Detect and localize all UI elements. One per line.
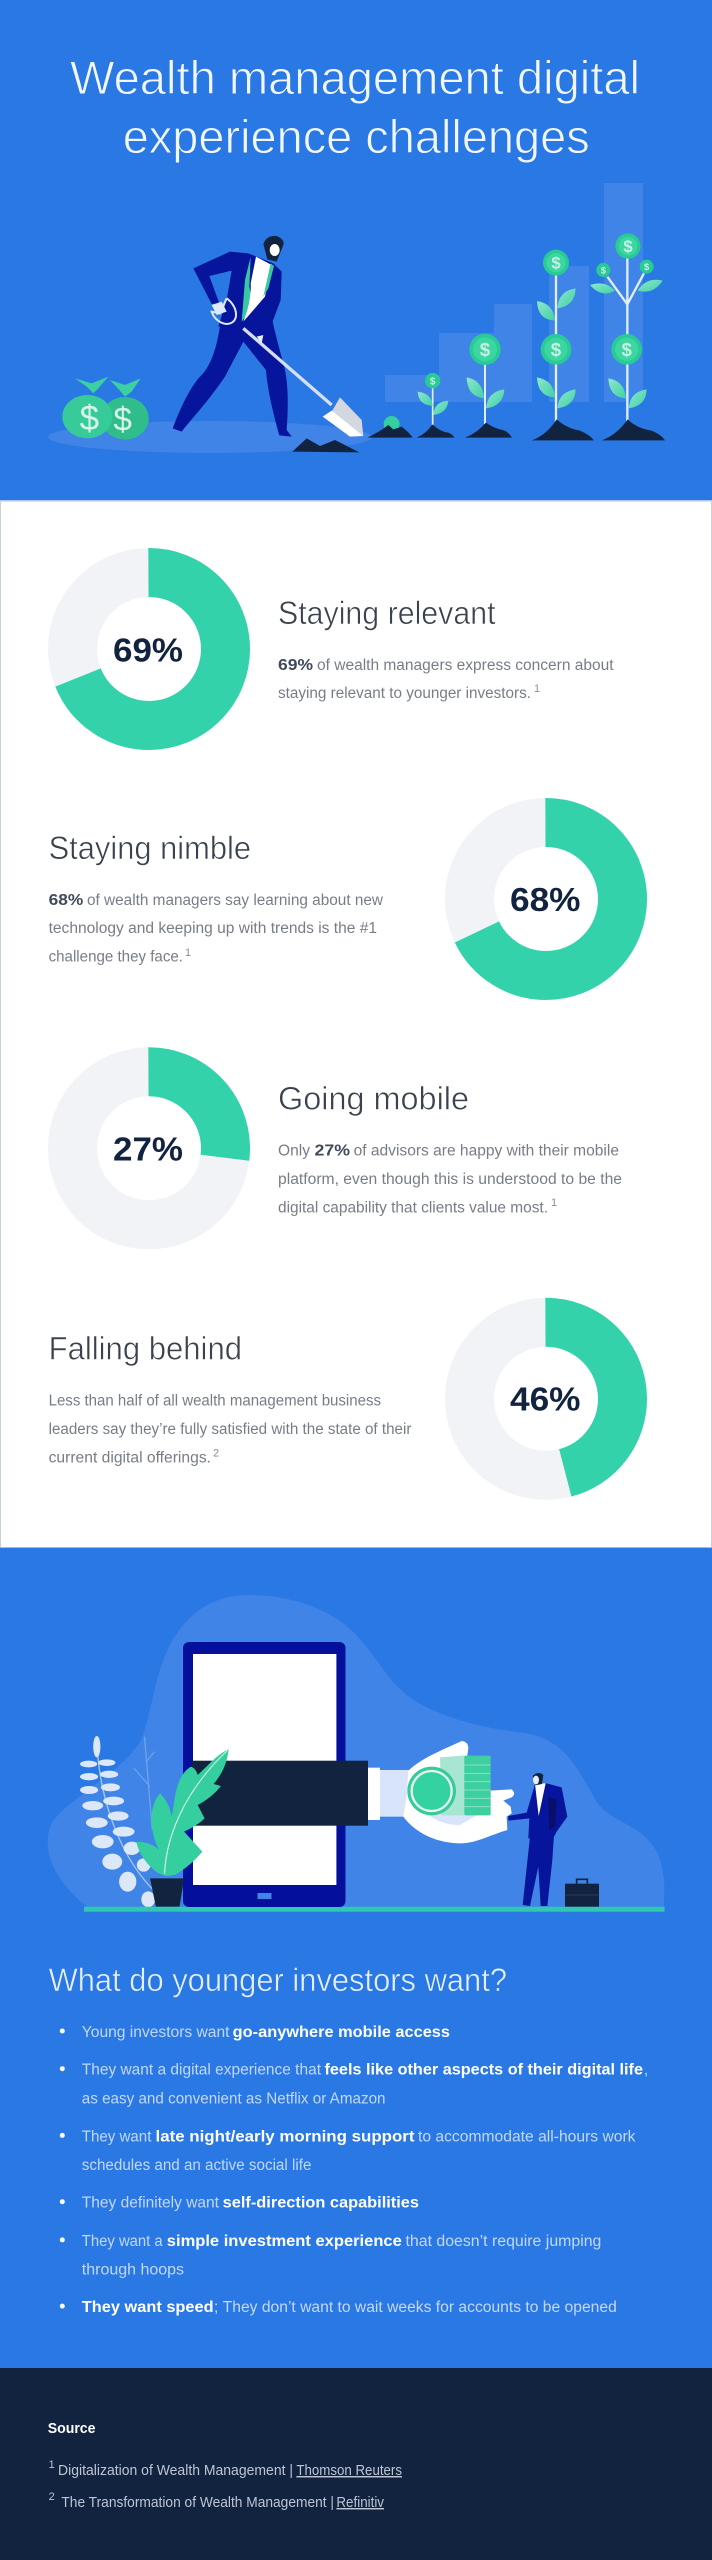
bullet: simple experience: simple investment experience	[167, 2233, 402, 2250]
block: falling behind: current digital offerings.	[49, 1449, 211, 1466]
bullet: digital experience: ,	[644, 2062, 648, 2079]
icon: money bags: $	[80, 399, 99, 438]
source 2: The Transformation of Wealth Management |	[61, 2495, 334, 2511]
bullet: support hours: schedules and an active social life	[82, 2157, 311, 2174]
block: staying nimble	[49, 830, 384, 966]
plant: tall: $	[551, 254, 561, 273]
bullet: simple experience: that doesn’t require jumping	[406, 2233, 601, 2250]
block: falling behind: Falling behind	[49, 1331, 242, 1367]
plant: small: $	[430, 376, 436, 387]
block: staying nimble: of wealth managers say learning about new	[87, 892, 384, 909]
bullet: self-direction: They definitely want	[82, 2195, 220, 2212]
block: staying nimble: technology and keeping up with trends is the #1	[49, 920, 377, 937]
block: going mobile: 27%	[314, 1142, 350, 1160]
title: Wealth management digital	[70, 51, 640, 104]
donut chart: 69%	[72, 572, 226, 726]
bullet: speed: They don’t want to wait weeks for accounts to be opened	[223, 2299, 617, 2316]
panel: source footer	[0, 2368, 712, 2560]
plant: medium: $	[480, 339, 491, 360]
plant: branching: $	[644, 262, 650, 272]
bullet: simple experience: through hoops	[82, 2261, 184, 2278]
block: staying relevant: Staying relevant	[278, 595, 496, 631]
block: falling behind: Less than half of all wealth management business	[49, 1392, 381, 1410]
source heading: Source	[48, 2420, 96, 2437]
bullet: digital experience: feels like other aspects of their digital life	[324, 2062, 643, 2079]
bullet: support hours: late night/early morning support	[156, 2128, 414, 2145]
bullet: simple experience	[60, 2233, 601, 2278]
block: staying relevant: 69%	[278, 657, 313, 674]
icon: hand with money	[368, 1741, 514, 1843]
plant: branching	[590, 233, 665, 440]
bullet: self-direction: self-direction capabilities	[223, 2195, 419, 2212]
plant: medium	[465, 334, 512, 438]
source 2: Refinitiv	[336, 2495, 385, 2511]
title: experience challenges	[123, 110, 590, 163]
title	[70, 51, 640, 163]
icon: potted plant	[136, 1749, 229, 1907]
source 1	[49, 2459, 402, 2479]
ground line	[84, 1907, 664, 1912]
icon: phone	[183, 1642, 346, 1907]
block: staying relevant: of wealth managers express concern about	[317, 657, 614, 674]
bullet: support hours: to accommodate all-hours work	[418, 2128, 636, 2145]
source 1: Digitalization of Wealth Management |	[58, 2463, 293, 2479]
block: staying relevant: staying relevant to younger investors.	[278, 685, 531, 702]
panel: hero	[0, 0, 712, 500]
ground ellipse	[48, 421, 372, 453]
block: going mobile	[278, 1081, 622, 1216]
block: falling behind: 2	[213, 1448, 219, 1460]
arm sleeve	[192, 1761, 368, 1826]
bullet: digital experience	[60, 2062, 648, 2108]
block: staying relevant: 1	[534, 683, 540, 695]
bullet list	[60, 2024, 648, 2316]
plant: tall: $	[551, 339, 562, 360]
plant: small	[417, 373, 454, 438]
bullet: digital experience: They want a digital experience that	[82, 2062, 322, 2079]
donut chart: 68%	[470, 822, 622, 976]
background blob	[48, 1595, 664, 1907]
bullet: mobile access: Young investors want	[82, 2024, 230, 2041]
bullet: support hours: They want	[82, 2128, 152, 2145]
donut chart: 27%	[72, 1072, 226, 1225]
plant: branching: $	[601, 265, 607, 275]
block: going mobile: 1	[551, 1197, 557, 1209]
growth bars	[385, 183, 643, 402]
bullet: speed: They want speed	[82, 2299, 214, 2316]
illustration: money plants	[367, 233, 665, 440]
donut chart: 69%: 69%	[113, 632, 183, 669]
donut chart: 68%: 68%	[510, 881, 580, 918]
bullet: digital experience: as easy and convenient as Netflix or Amazon	[82, 2091, 386, 2108]
block: falling behind	[49, 1331, 411, 1466]
panel: younger investors	[0, 1548, 712, 2368]
plant: sprout	[367, 416, 413, 438]
block: staying nimble: 68%	[49, 892, 83, 909]
illustration: man digging	[173, 236, 363, 452]
donut chart: 46%	[470, 1322, 622, 1475]
block: staying nimble: challenge they face.	[49, 949, 183, 966]
block: going mobile: Going mobile	[278, 1081, 469, 1117]
block: going mobile: of advisors are happy with their mobile	[354, 1142, 619, 1160]
plant: branching: $	[623, 237, 633, 256]
source 2: 2	[49, 2491, 55, 2503]
bullet: self-direction	[60, 2195, 419, 2212]
source 1: Thomson Reuters	[296, 2463, 402, 2479]
block: going mobile: Only	[278, 1142, 310, 1160]
plant: branching: $	[621, 339, 632, 360]
bullet: speed: ;	[214, 2299, 218, 2316]
plant: tall	[532, 250, 594, 440]
block: going mobile: digital capability that clients value most.	[278, 1199, 548, 1216]
icon: money bags: $	[113, 402, 132, 439]
panel: challenges	[0, 500, 712, 1548]
icon: small businessman	[508, 1773, 567, 1906]
bullet: support hours	[60, 2128, 636, 2174]
heading: What do younger investors want?	[49, 1962, 507, 1998]
donut chart: 27%: 27%	[113, 1131, 183, 1168]
source 2	[49, 2491, 385, 2511]
bullet: mobile access: go-anywhere mobile access	[233, 2024, 450, 2041]
icon: fern	[80, 1736, 157, 1907]
block: going mobile: platform, even though this is understood to be the	[278, 1171, 622, 1188]
bullet: simple experience: They want a	[82, 2233, 163, 2250]
block: staying nimble: 1	[185, 947, 191, 959]
block: falling behind: leaders say they’re fully satisfied with the state of their	[49, 1421, 411, 1438]
donut chart: 46%: 46%	[510, 1381, 580, 1418]
icon: briefcase	[565, 1879, 599, 1907]
icon: money bags	[62, 377, 149, 440]
block: staying relevant	[278, 595, 614, 702]
block: staying nimble: Staying nimble	[49, 830, 251, 866]
source 1: 1	[49, 2459, 55, 2471]
illustration: phone and hand	[48, 1595, 664, 1912]
bullet: mobile access	[60, 2024, 450, 2041]
